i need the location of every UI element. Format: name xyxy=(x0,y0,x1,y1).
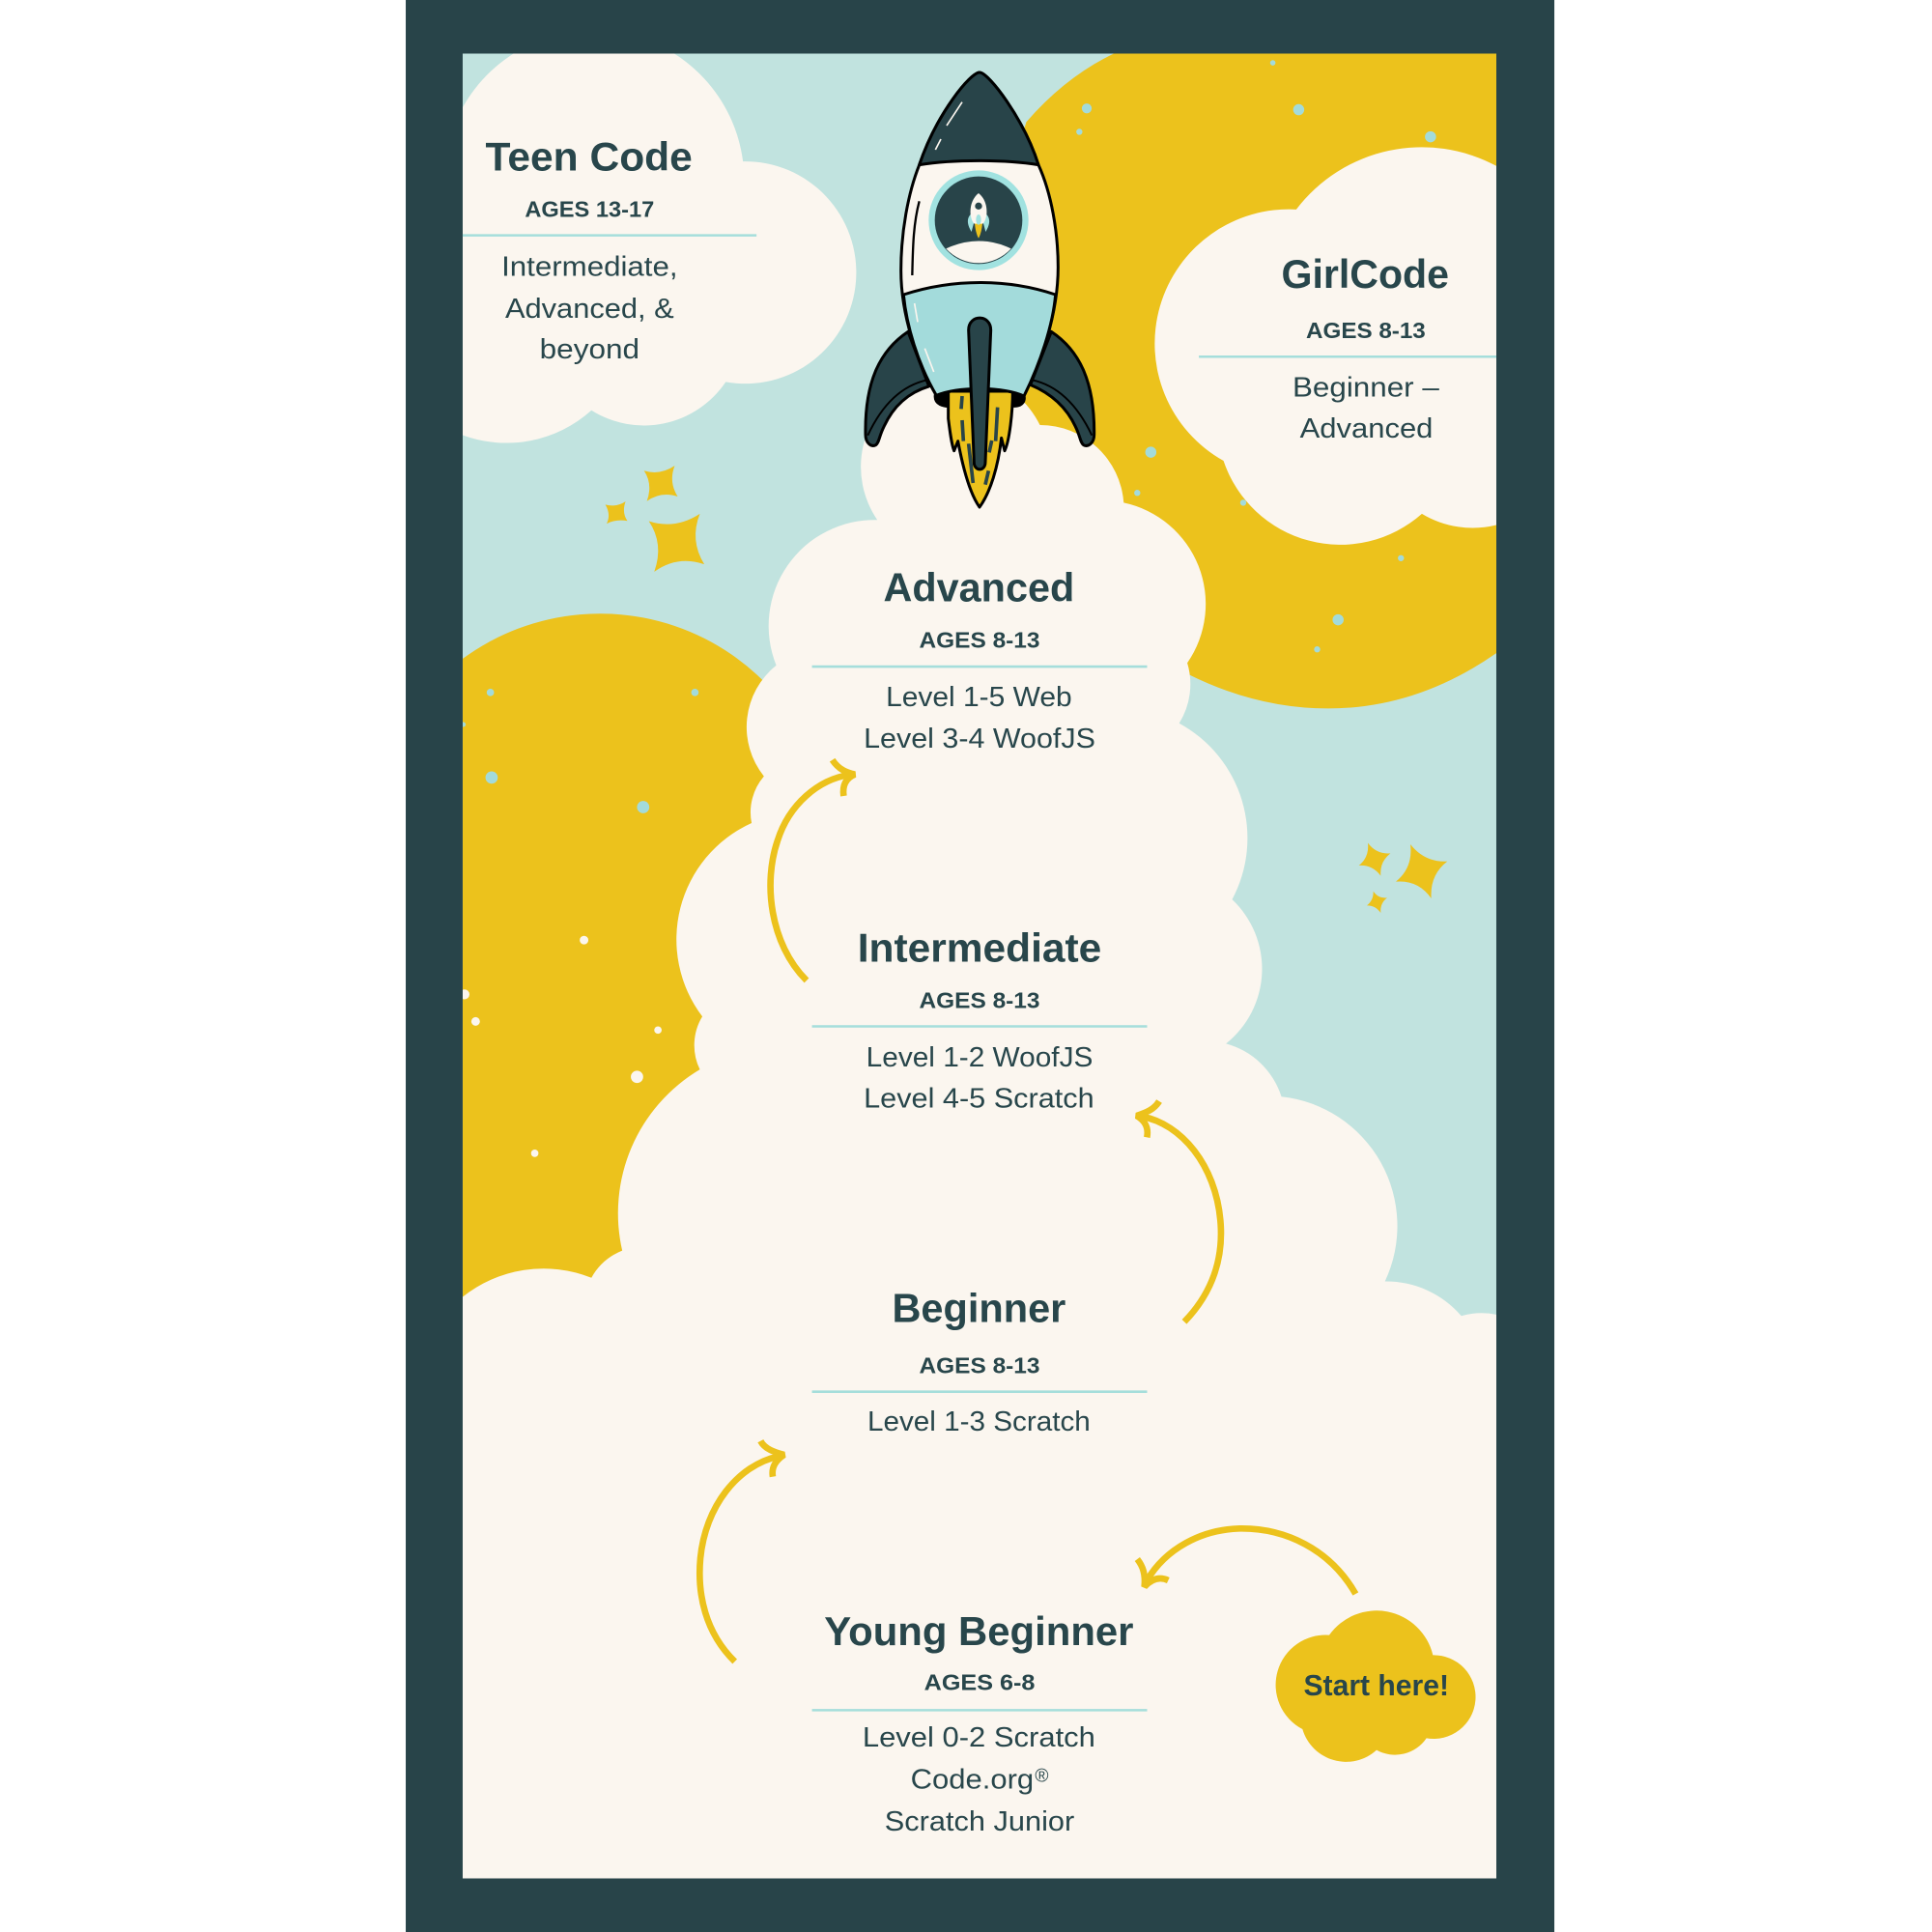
aqua dots on top right cloud xyxy=(1076,60,1436,652)
white highlights xyxy=(915,102,962,372)
description: Advanced xyxy=(1300,413,1433,444)
arrow: Young Beginner to Beginner xyxy=(699,1441,784,1662)
heading: GirlCode xyxy=(1282,251,1449,297)
description xyxy=(501,252,678,365)
arrow: Start here to Young Beginner xyxy=(1137,1528,1355,1594)
heading: Young Beginner xyxy=(824,1608,1133,1654)
badge label: Start here! xyxy=(1303,1669,1449,1702)
nozzle xyxy=(935,394,1024,406)
sparkles: right xyxy=(1359,843,1447,913)
cloud: Teen Code xyxy=(462,30,856,443)
badge cloud: Start here xyxy=(1276,1610,1476,1762)
infographic xyxy=(406,0,1555,1932)
levels: Scratch Junior xyxy=(885,1806,1075,1837)
ages: AGES 6-8 xyxy=(924,1669,1035,1694)
main stacked cloud xyxy=(462,372,1497,1879)
levels xyxy=(863,1722,1095,1837)
levels: Level 0-2 Scratch xyxy=(863,1722,1095,1753)
mini rocket flame xyxy=(975,222,982,239)
flame xyxy=(949,391,1012,507)
background clouds and shapes xyxy=(460,30,1497,1879)
porthole xyxy=(928,170,1029,270)
mini rocket fins xyxy=(968,214,989,232)
description: Advanced, & xyxy=(505,294,674,325)
heading: Advanced xyxy=(884,564,1074,610)
fin edges xyxy=(867,380,1092,436)
cloud: GirlCode xyxy=(1154,147,1497,545)
dark frame xyxy=(406,0,1554,1932)
sky background xyxy=(463,53,1496,1879)
ages: AGES 8-13 xyxy=(920,987,1040,1012)
left fin xyxy=(866,331,929,445)
highlights xyxy=(912,201,920,275)
levels xyxy=(864,682,1095,754)
mini rocket centre xyxy=(976,214,981,225)
sparkles: left xyxy=(606,466,704,572)
heading: Intermediate xyxy=(858,925,1101,971)
flame streaks xyxy=(961,396,998,485)
block: GirlCode xyxy=(1199,251,1496,444)
levels: Level 1-3 Scratch xyxy=(867,1406,1091,1437)
heading: Teen Code xyxy=(486,134,693,180)
block: Teen Code xyxy=(463,134,756,365)
ages: AGES 8-13 xyxy=(920,627,1040,652)
description xyxy=(1293,372,1439,444)
mini rocket window xyxy=(975,203,982,210)
center fin xyxy=(969,318,991,469)
right fin xyxy=(1031,331,1094,445)
arrow: Beginner to Intermediate xyxy=(1137,1101,1221,1321)
levels xyxy=(864,1042,1094,1115)
yellow cloud: left xyxy=(463,613,764,1296)
rocket nose xyxy=(920,72,1038,165)
rocket body xyxy=(901,72,1058,396)
rocket xyxy=(866,72,1094,507)
rocket lower body xyxy=(903,282,1056,396)
block: Beginner xyxy=(812,1286,1148,1437)
mini rocket body xyxy=(971,193,986,224)
ground in porthole xyxy=(946,241,1011,263)
levels: Level 1-5 Web xyxy=(886,682,1072,713)
ages: AGES 13-17 xyxy=(525,196,654,221)
description: Beginner – xyxy=(1293,372,1439,403)
block: Young Beginner xyxy=(812,1608,1148,1837)
levels: Level 3-4 WoofJS xyxy=(864,724,1095,754)
yellow cloud: top right xyxy=(985,53,1496,708)
levels: Level 4-5 Scratch xyxy=(864,1084,1094,1115)
description: beyond xyxy=(540,334,639,365)
arrow: Intermediate to Advanced xyxy=(771,760,855,980)
heading: Beginner xyxy=(892,1286,1065,1331)
description: Intermediate, xyxy=(501,252,678,283)
levels: ® xyxy=(1035,1766,1049,1786)
block: Advanced xyxy=(812,564,1148,754)
dots on left cloud xyxy=(460,689,698,1157)
ages: AGES 8-13 xyxy=(920,1353,1040,1378)
block: Intermediate xyxy=(812,925,1148,1115)
ages: AGES 8-13 xyxy=(1306,318,1426,343)
levels: Code.org xyxy=(911,1765,1034,1796)
levels: Level 1-2 WoofJS xyxy=(867,1042,1093,1073)
